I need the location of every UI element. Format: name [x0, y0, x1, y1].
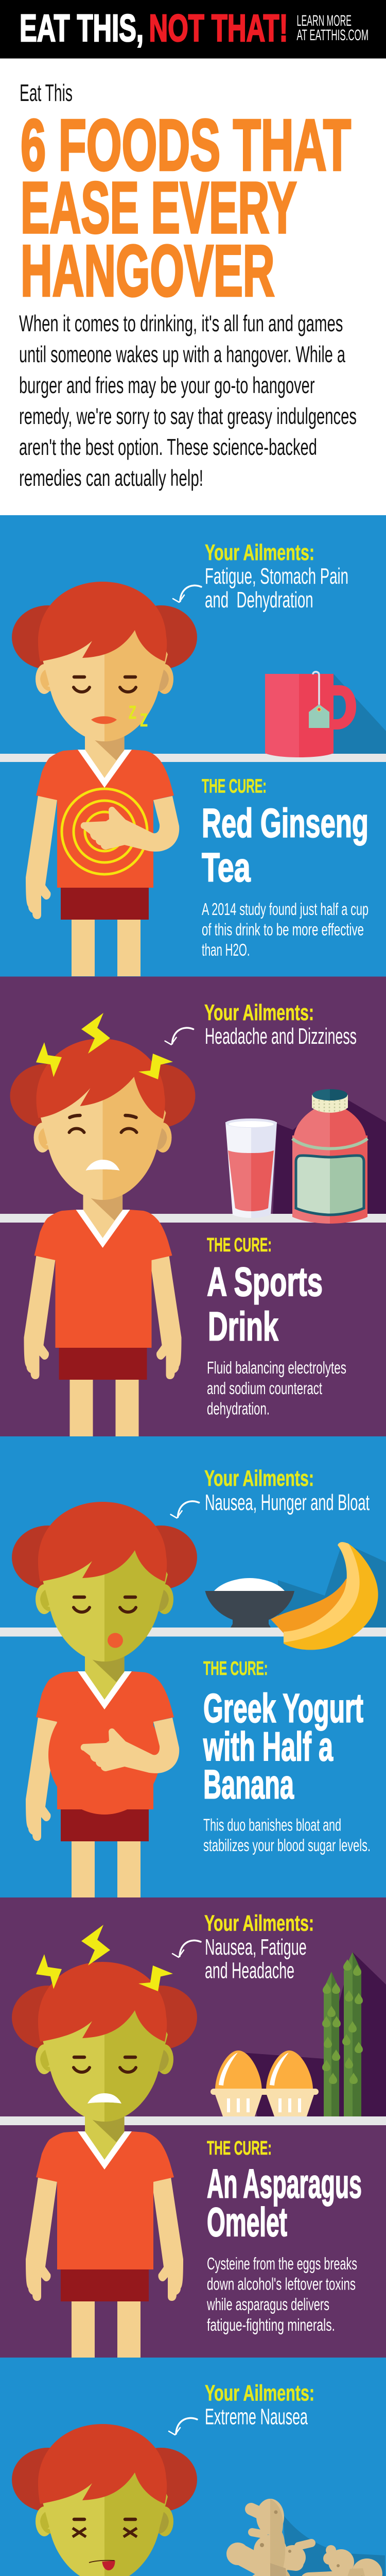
logo: eat this, not that — [20, 7, 288, 49]
shadow: mug — [334, 674, 386, 754]
character: nausea and headache — [12, 1962, 197, 2358]
icon: eggs in carton — [210, 2050, 319, 2116]
arrow — [173, 585, 201, 602]
icon: sleepy z's: Z — [129, 702, 136, 723]
cure text: Drink — [208, 1303, 278, 1349]
arrow — [171, 1501, 199, 1518]
shadow: ginger — [283, 2515, 385, 2576]
ailments text: Your Ailments: — [205, 2381, 314, 2406]
cure text — [203, 1657, 371, 1855]
icon: lightning bolts — [36, 1925, 173, 1991]
icon: bowl of yogurt — [205, 1578, 294, 1628]
character: headache — [10, 1039, 196, 1436]
logo: eat this, not that: NOT THAT! — [149, 7, 288, 49]
character: extreme nausea — [12, 2424, 197, 2576]
icon: tea mug — [265, 672, 351, 757]
cure text — [207, 1234, 346, 1418]
cure text: dehydration. — [207, 1399, 270, 1418]
learn more link text — [296, 12, 369, 44]
cure text: and sodium counteract — [207, 1379, 322, 1398]
icon: ginger root — [226, 2499, 382, 2576]
cure text: THE CURE: — [207, 2137, 272, 2159]
ailments text: and Headache — [205, 1959, 294, 1984]
ailments text: Extreme Nausea — [205, 2405, 308, 2430]
ailments text — [204, 1001, 357, 1049]
panel: greek yogurt with half a banana — [0, 1436, 386, 1898]
icon: sleepy z's — [129, 702, 148, 731]
icon: asparagus — [322, 1952, 363, 2116]
ailments text: Your Ailments: — [204, 1466, 314, 1491]
arrow — [169, 2418, 197, 2435]
ailments text: Your Ailments: — [204, 1001, 314, 1025]
panel: asparagus omelet — [0, 1897, 386, 2358]
logo: eat this, not that: EAT THIS, — [20, 7, 144, 49]
icon: sports drink bottle — [292, 1089, 367, 1224]
ailments text: Your Ailments: — [205, 540, 314, 565]
cure text: THE CURE: — [202, 775, 267, 798]
ailments text: and Dehydration — [205, 588, 313, 613]
ailments text — [204, 1911, 314, 1984]
eyebrow: eat this: Eat This — [20, 79, 73, 106]
cure text: Banana — [203, 1761, 294, 1807]
ailments text: Your Ailments: — [204, 1911, 314, 1936]
cure text: Omelet — [207, 2199, 287, 2245]
cure text — [206, 2137, 362, 2334]
character: bloated nausea — [12, 1502, 197, 1898]
title — [21, 104, 351, 311]
cure text — [202, 775, 369, 959]
icon: sleepy z's: Z — [140, 709, 148, 731]
icon: banana — [271, 1542, 378, 1650]
panel: ginger — [0, 2358, 386, 2576]
ailments text — [204, 1466, 370, 1515]
character: stomach pain — [12, 582, 197, 976]
ailments text — [205, 2381, 314, 2430]
cure text: Tea — [202, 844, 251, 890]
intro paragraph — [19, 311, 357, 491]
intro paragraph: remedies can actually help! — [19, 466, 203, 491]
cure text: A Sports — [207, 1259, 323, 1304]
header bar — [0, 0, 386, 59]
cure text: THE CURE: — [207, 1234, 272, 1256]
arrow — [172, 1940, 201, 1957]
icon: lightning bolts — [36, 1013, 173, 1079]
shadow: eggs and asparagus — [241, 1952, 386, 2116]
ailments text — [205, 540, 348, 613]
shadow: bowl and banana — [278, 1543, 386, 1628]
cure text: THE CURE: — [203, 1657, 268, 1680]
cure text: than H2O. — [202, 940, 250, 959]
ailments text: Nausea, Fatigue — [205, 1935, 307, 1960]
icon: glass of sports drink — [225, 1118, 277, 1218]
shadow: drink and bottle — [273, 1100, 386, 1214]
arrow — [165, 1028, 194, 1045]
panel: red ginseng tea — [0, 515, 386, 977]
panel: sports drink — [0, 977, 386, 1436]
